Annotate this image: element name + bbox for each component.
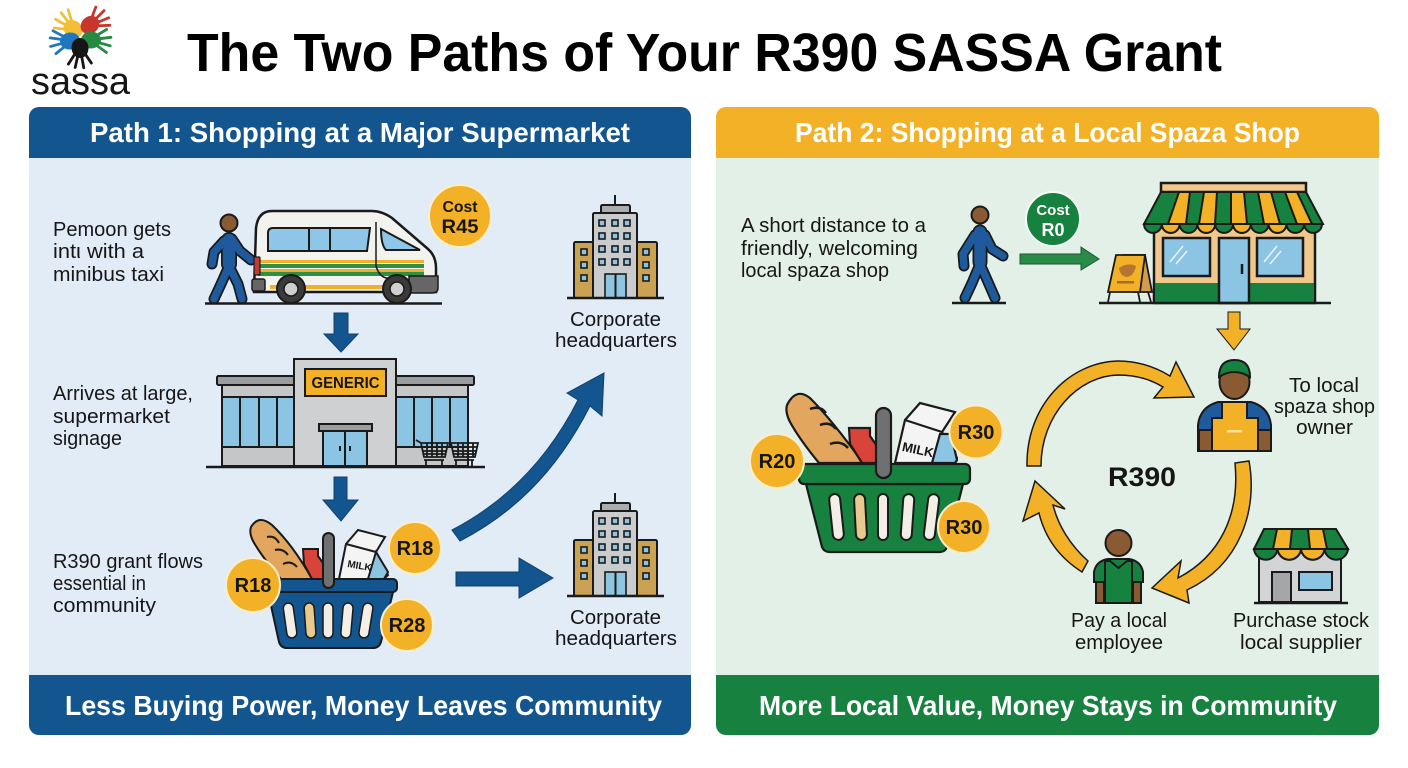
price badge R28: R28 bbox=[389, 615, 425, 637]
icon: person walking bbox=[952, 206, 1006, 303]
panel: path 2 spaza shop bbox=[716, 107, 1379, 735]
cost badge R0: R0 bbox=[1041, 220, 1065, 240]
text: purchase stock local supplier: local supplier bbox=[1240, 631, 1362, 654]
milk carton: MILK bbox=[901, 439, 936, 460]
milk carton: MILK bbox=[346, 559, 373, 574]
text: to local spaza shop owner bbox=[1274, 374, 1375, 439]
text: arrives at supermarket bbox=[53, 382, 193, 450]
text: person gets into taxi: intι with a bbox=[53, 240, 145, 263]
arrow: taxi to supermarket bbox=[324, 313, 358, 352]
text: grant flows: essential in bbox=[53, 572, 146, 595]
text: short distance: local spaza shop bbox=[741, 259, 889, 282]
panel: path 1 supermarket bbox=[29, 107, 691, 735]
arrow: basket to owner bbox=[1027, 361, 1194, 466]
text: corporate headquarters top: Corporate bbox=[570, 308, 661, 331]
text: corporate headquarters bottom bbox=[555, 606, 677, 650]
text: arrives at supermarket: signage bbox=[53, 427, 122, 450]
text: person gets into taxi: minibus taxi bbox=[53, 263, 164, 286]
panel 1 footer bbox=[29, 675, 691, 735]
price badge R20 bbox=[750, 434, 804, 488]
price badge R18 left: R18 bbox=[235, 575, 271, 597]
text: corporate headquarters bottom: headquarters bbox=[555, 627, 677, 650]
panel 2 footer bbox=[716, 675, 1379, 735]
icon: shopping carts bbox=[416, 440, 478, 466]
text: grant flows bbox=[53, 550, 203, 617]
text: corporate headquarters bottom: Corporate bbox=[570, 606, 661, 629]
text: purchase stock local supplier: Purchase stock bbox=[1233, 609, 1370, 632]
milk carton bbox=[339, 530, 388, 579]
price badge R18 right bbox=[389, 522, 441, 574]
icon: corporate building bottom bbox=[567, 493, 664, 596]
price badge R30 top bbox=[950, 406, 1002, 458]
price badge R18 right: R18 bbox=[397, 538, 433, 560]
bottle bbox=[303, 549, 323, 579]
text: R390: R390 bbox=[1108, 462, 1176, 492]
icon: green grocery basket bbox=[786, 394, 970, 552]
cost badge R45: Cost bbox=[442, 199, 478, 216]
text: to local spaza shop owner: To local bbox=[1289, 374, 1359, 397]
price badge R18 left bbox=[226, 558, 280, 612]
icon: minibus taxi bbox=[205, 211, 442, 304]
milk carton bbox=[895, 403, 957, 463]
icon: supermarket bbox=[206, 359, 485, 467]
panel 1 header: Path 1: Shopping at a Major Supermarket bbox=[90, 117, 630, 148]
icon: A-frame sign bbox=[1108, 255, 1152, 302]
text: short distance: friendly, welcoming bbox=[741, 237, 918, 260]
panel 2 footer: More Local Value, Money Stays in Community bbox=[759, 690, 1337, 721]
panel 2 background bbox=[716, 107, 1379, 735]
panel 1 background bbox=[29, 107, 691, 735]
arrow: supermarket to basket bbox=[323, 477, 358, 521]
text: short distance: A short distance to a bbox=[741, 214, 927, 237]
logo: sassa bbox=[31, 4, 131, 103]
icon: shop owner bbox=[1198, 360, 1271, 451]
text: pay a local employee bbox=[1071, 609, 1167, 654]
text: grant flows: community bbox=[53, 594, 157, 617]
logo wordmark: sassa bbox=[31, 61, 131, 103]
text: purchase stock local supplier bbox=[1233, 609, 1370, 654]
cost badge R0 bbox=[1026, 192, 1080, 246]
bread bbox=[250, 520, 312, 579]
arrow: owner to employee bbox=[1152, 461, 1251, 603]
text: grant flows: R390 grant flows bbox=[53, 550, 203, 573]
icon: five coloured hands bbox=[48, 4, 114, 69]
text: corporate headquarters top: headquarters bbox=[555, 329, 677, 352]
arrow: to spaza shop bbox=[1020, 247, 1099, 270]
bread bbox=[786, 394, 863, 463]
text: person gets into taxi: Pemoon gets bbox=[53, 218, 171, 241]
icon: spaza shop bbox=[1099, 183, 1331, 303]
price badge R20: R20 bbox=[759, 451, 795, 473]
panel 1 header bbox=[29, 107, 691, 158]
arrow: straight to headquarters bbox=[456, 558, 553, 598]
price badge R30 bottom: R30 bbox=[946, 517, 982, 539]
price badge R28 bbox=[381, 599, 433, 651]
text: to local spaza shop owner: spaza shop bbox=[1274, 395, 1375, 418]
text: short distance bbox=[741, 214, 927, 282]
panel 1 footer: Less Buying Power, Money Leaves Community bbox=[65, 690, 662, 721]
awning bbox=[1144, 192, 1323, 233]
icon: person walking to taxi bbox=[212, 214, 251, 299]
price badge R30 top: R30 bbox=[958, 422, 994, 444]
title: The Two Paths of Your R390 SASSA Grant bbox=[187, 23, 1222, 83]
price badge R30 bottom bbox=[938, 501, 990, 553]
sign: GENERIC: GENERIC bbox=[312, 375, 380, 392]
arrow: shop to owner bbox=[1217, 312, 1250, 350]
cost badge R45: R45 bbox=[442, 217, 479, 238]
cost badge R45 bbox=[429, 185, 491, 247]
panel 2 header bbox=[716, 107, 1379, 158]
icon: local employee bbox=[1094, 530, 1143, 603]
arrow: employee to basket bbox=[1023, 481, 1088, 572]
text: person gets into taxi bbox=[53, 218, 171, 286]
text: arrives at supermarket: supermarket bbox=[53, 405, 170, 428]
cost badge R0: Cost bbox=[1036, 202, 1070, 219]
text: arrives at supermarket: Arrives at large, bbox=[53, 382, 193, 405]
icon: local supplier shop bbox=[1254, 529, 1348, 603]
text: corporate headquarters top bbox=[555, 308, 677, 352]
text: to local spaza shop owner: owner bbox=[1296, 416, 1353, 439]
icon: corporate building top bbox=[567, 195, 664, 298]
text: pay a local employee: Pay a local bbox=[1071, 609, 1167, 632]
text: pay a local employee: employee bbox=[1075, 631, 1163, 654]
icon: blue grocery basket bbox=[250, 520, 397, 648]
panel 2 header: Path 2: Shopping at a Local Spaza Shop bbox=[795, 117, 1300, 148]
cycle: R390 circular flow bbox=[1023, 361, 1251, 603]
arrow: curved up to headquarters bbox=[452, 373, 604, 541]
bottle bbox=[849, 428, 877, 463]
sign: GENERIC bbox=[305, 369, 386, 396]
